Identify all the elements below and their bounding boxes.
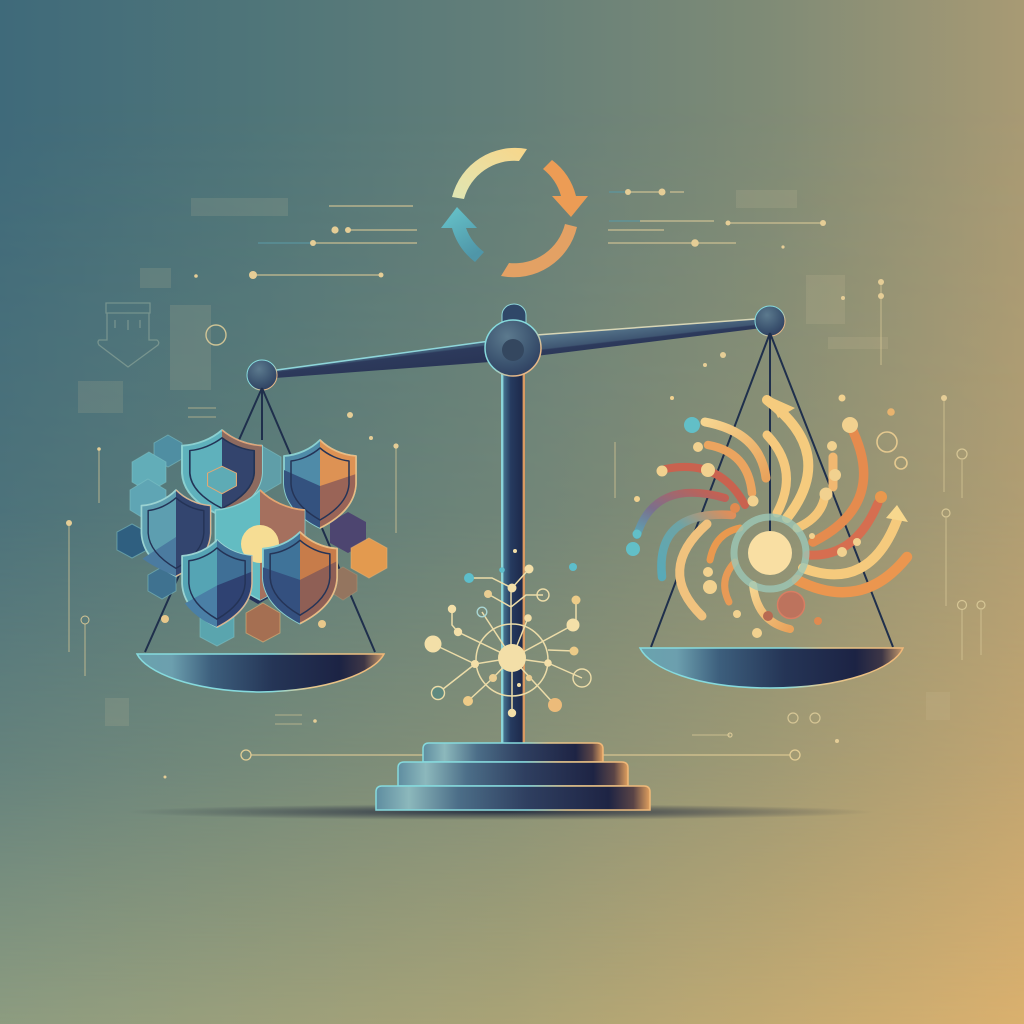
arrow: orange down — [543, 160, 588, 217]
arrow: teal up — [441, 207, 484, 262]
scale beam: left arm — [262, 341, 490, 379]
shield: lower right — [263, 532, 337, 624]
right pan — [640, 648, 903, 688]
decorative nodes and lines: left side — [66, 274, 399, 778]
shield: top right — [284, 440, 356, 528]
decorative translucent blocks — [78, 190, 950, 726]
left beam end — [247, 360, 277, 390]
red node — [778, 592, 804, 618]
swirl dots — [626, 394, 895, 638]
swirl rings — [877, 432, 907, 469]
swirl arcs — [637, 400, 907, 629]
scale base — [376, 743, 650, 810]
left pan — [137, 654, 384, 692]
circuit lines: top left — [249, 206, 417, 279]
panel: network — [424, 549, 591, 717]
shield: centre with sun — [215, 490, 305, 600]
baseline connectors — [241, 750, 800, 760]
base step: bottom — [376, 786, 650, 810]
network ring — [476, 624, 548, 696]
floor shadow — [125, 804, 875, 820]
shield: lower left — [182, 540, 252, 627]
pivot — [485, 320, 541, 376]
arc: yellow — [452, 148, 527, 199]
shield: back centre — [182, 430, 262, 516]
swirl core — [734, 517, 806, 589]
network nodes — [424, 549, 580, 717]
sun — [241, 525, 279, 563]
right pan strings — [651, 333, 893, 647]
base step: top — [423, 743, 603, 762]
shield dots — [161, 615, 326, 628]
base step: middle — [398, 762, 628, 786]
scale post — [501, 350, 525, 744]
shield: left — [141, 490, 211, 576]
swirl arrowheads — [768, 396, 908, 522]
panel: swirl — [626, 394, 908, 638]
hexagon cluster — [117, 435, 387, 646]
right beam end — [755, 306, 785, 336]
top nub — [502, 304, 526, 336]
arc: orange lower — [501, 224, 577, 277]
icon: cycle arrows — [441, 148, 588, 277]
network lines — [433, 569, 582, 713]
circuit lines: top right — [608, 188, 826, 249]
network rings — [432, 589, 591, 700]
panel: shields and hexagons — [117, 430, 387, 646]
left pan strings — [145, 388, 375, 652]
scale beam: right arm — [536, 318, 770, 356]
decorative nodes and lines: right side — [615, 279, 985, 743]
icon: faint down arrow schematic — [98, 303, 159, 367]
